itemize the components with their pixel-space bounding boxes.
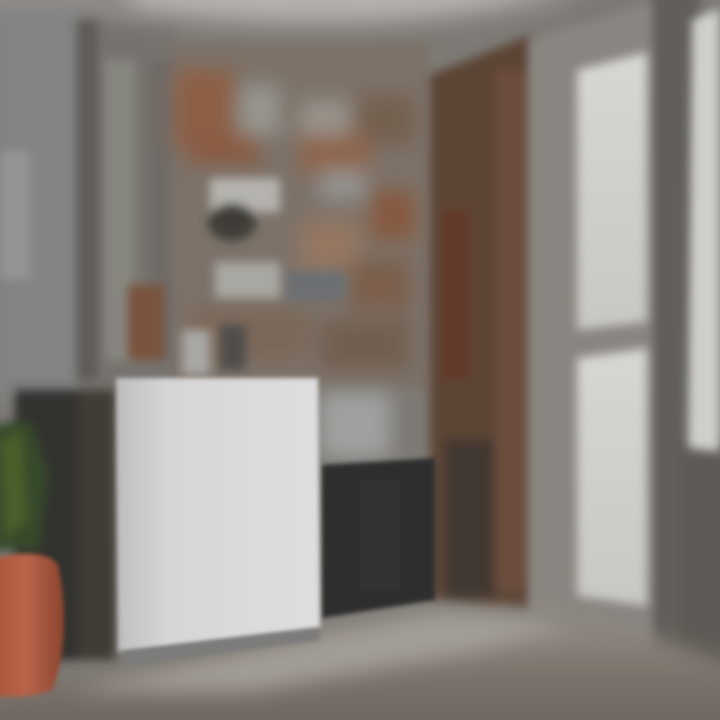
white cabinet bbox=[116, 378, 320, 652]
pale wall behind cabinets bbox=[320, 392, 390, 458]
plant bbox=[0, 420, 48, 550]
dark side panel bbox=[15, 390, 115, 660]
shelf objects in focus bbox=[128, 178, 345, 375]
ceiling bbox=[0, 0, 600, 30]
terracotta pot bbox=[0, 554, 64, 697]
window panes bbox=[577, 8, 720, 606]
cabinet base shadow bbox=[118, 628, 320, 665]
floor bbox=[0, 608, 720, 720]
wood column bbox=[430, 35, 530, 610]
wall tile panel bbox=[0, 20, 172, 380]
window frame bbox=[530, 0, 720, 720]
shelving with objects bbox=[175, 70, 415, 370]
dark cabinet bbox=[322, 458, 435, 618]
